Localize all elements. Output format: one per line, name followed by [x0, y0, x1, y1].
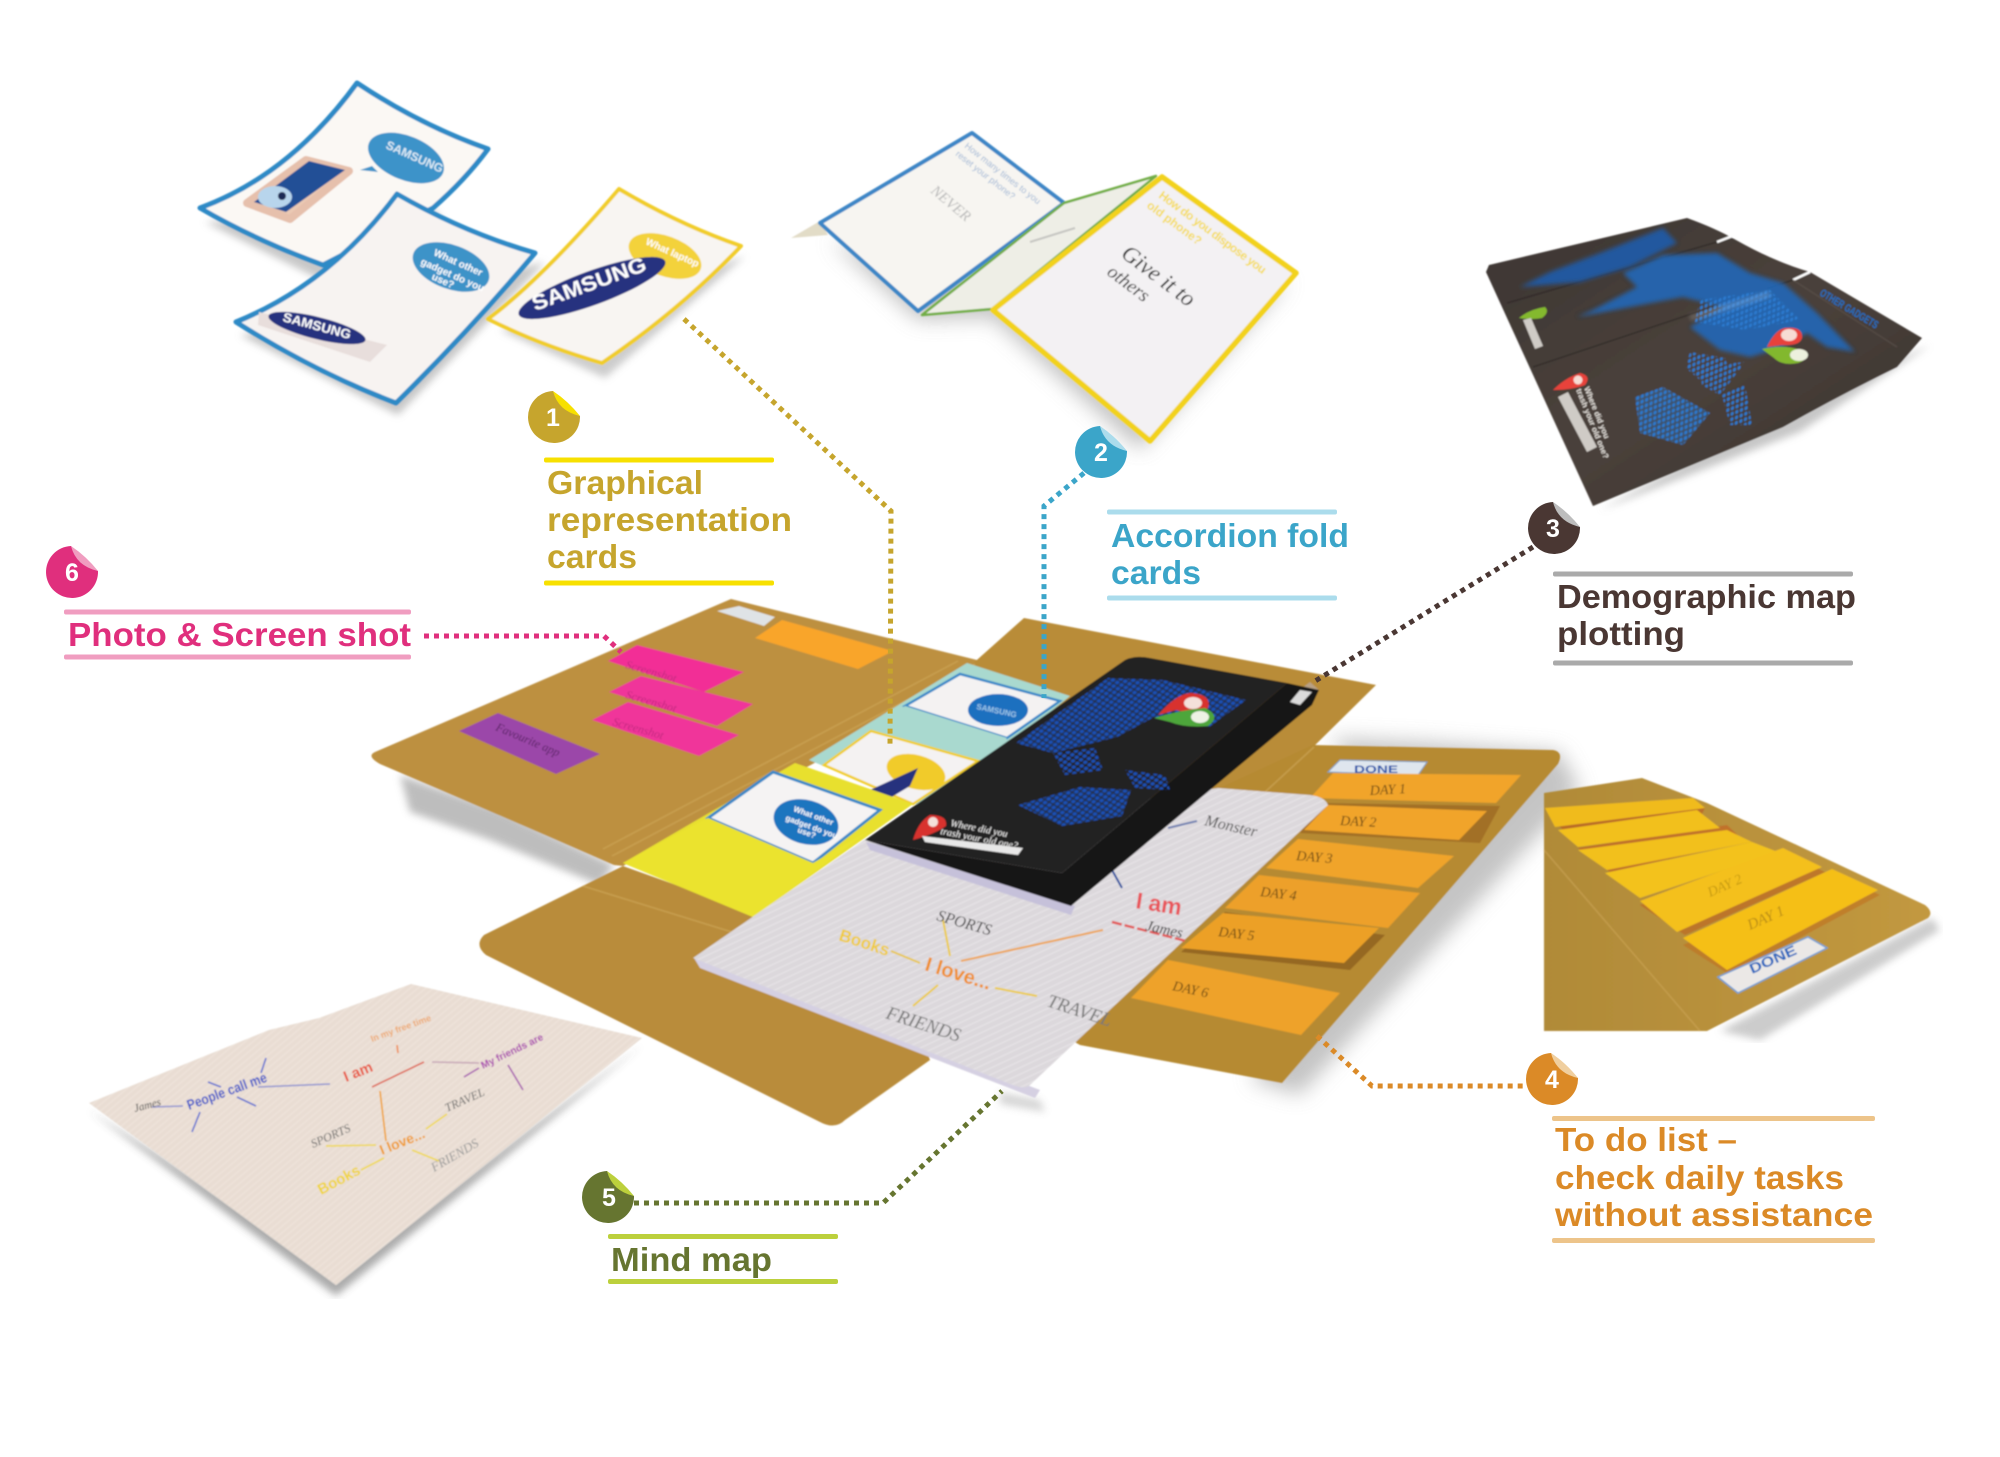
label 5: mind map [608, 1234, 838, 1284]
label 2: accordion fold cards: Accordion fold [1111, 517, 1349, 554]
accordion yellow panel: others [1103, 261, 1154, 307]
sticky notes: magenta, purple, orange, label: Favourite app [493, 719, 562, 759]
yellow pocket with blue card: What other [792, 804, 835, 827]
mind map pamphlet: Books [837, 926, 892, 960]
to-do slit shadows and notes: DAY 1 [1744, 903, 1787, 934]
mint pocket with cards: SAMSUNG [976, 702, 1017, 719]
panel: to-do list photo [1544, 778, 1940, 1040]
to-do day notes: DAY 4 [1259, 885, 1297, 904]
to-do day notes: DAY 3 [1295, 849, 1333, 867]
to-do day notes: DAY 5 [1217, 925, 1255, 944]
label 6: photo and screen shot: Photo & Screen shot [68, 616, 411, 653]
panel: mind map sheet photo: TRAVEL [443, 1085, 487, 1115]
card: yellow Samsung logo: SAMSUNG [529, 253, 649, 316]
badge 6: 6 [65, 559, 79, 587]
sticky notes: magenta, purple, orange, label: Screenshot [624, 687, 679, 715]
accordion blue panel: NEVER [927, 182, 973, 225]
badge 2: 2 [1094, 439, 1108, 467]
yellow pocket with blue card [623, 763, 913, 917]
label 4: to do list: check daily tasks [1555, 1159, 1844, 1196]
map answer bars and captions [1523, 287, 1880, 460]
badge 6 [46, 546, 98, 598]
panel: accordion fold cards photo [791, 133, 1296, 450]
badge 4: 4 [1545, 1066, 1559, 1094]
badge 2 [1075, 426, 1127, 478]
card: what other gadget: use? [430, 272, 456, 291]
folder top right flap [950, 618, 1376, 850]
panel: mind map sheet photo: My friends are [479, 1032, 546, 1072]
to-do slit shadows and notes: DAY 2 [1705, 872, 1745, 901]
label 6: photo and screen shot [64, 610, 411, 660]
to-do day notes: DAY 2 [1339, 814, 1377, 831]
sticky notes: magenta, purple, orange, label: Screenshot [611, 714, 666, 742]
map land masses [1520, 228, 1855, 445]
sticky notes: magenta, purple, orange, label [459, 606, 893, 774]
label 3: demographic map plotting: Demographic map [1557, 578, 1856, 615]
mind map pamphlet: I love... [923, 954, 994, 995]
folder bottom flap [479, 866, 930, 1126]
to-do done tag: DONE [1747, 942, 1799, 977]
card: phone with Samsung bubble [200, 83, 488, 282]
label 5: mind map: Mind map [611, 1241, 772, 1278]
card: yellow Samsung logo [488, 189, 745, 378]
label 4: to do list: without assistance [1554, 1196, 1873, 1233]
folder right panel [1000, 745, 1560, 1083]
to-do day notes: DAY 1 [1368, 782, 1406, 799]
card: what other gadget [236, 194, 545, 415]
to-do slit shadows and notes [1545, 798, 1880, 975]
label 1: graphical representation cards: cards [547, 538, 637, 575]
label 1: graphical representation cards: representation [547, 501, 792, 538]
badge 3: 3 [1546, 515, 1560, 543]
folder creases [583, 661, 1314, 933]
label 1: graphical representation cards [544, 458, 792, 586]
label 3: demographic map plotting [1553, 572, 1856, 666]
mind map pamphlet [693, 788, 1328, 1098]
badge 3 [1528, 502, 1580, 554]
panel: mind map sheet photo: SPORTS [309, 1121, 353, 1151]
leader line 1 [684, 319, 891, 745]
yellow pocket with blue card: use? [796, 825, 817, 840]
panel: mind map sheet photo [89, 984, 642, 1296]
accordion green middle panel [922, 176, 1156, 315]
leader line 6 [424, 636, 621, 652]
badge 5 [582, 1171, 634, 1223]
card: what other gadget: gadget do you [419, 257, 486, 295]
badge 1: 1 [546, 404, 560, 432]
mind map pamphlet: Monster [1202, 812, 1260, 841]
accordion blue panel: reset your phone? [954, 149, 1017, 201]
to-do day notes: DAY 6 [1170, 979, 1210, 1001]
mint pocket with cards [809, 663, 1070, 810]
panel: demographic map photo [1486, 218, 1930, 510]
black map booklet: trash your old one? [939, 826, 1019, 852]
folder left panel [371, 599, 985, 866]
folder shadows [400, 738, 1580, 1112]
label 4: to do list [1552, 1116, 1875, 1243]
to-do day notes: DONE [1354, 764, 1398, 776]
panel: mind map sheet photo: I am [341, 1059, 375, 1086]
card: phone with Samsung bubble: SAMSUNG [384, 138, 446, 176]
map answer bars and captions: trash your old one? [1574, 387, 1611, 460]
mind map pamphlet: FRIENDS [883, 1002, 964, 1047]
panel: mind map sheet photo: People call me [185, 1069, 269, 1113]
black map booklet: Where did you [949, 818, 1008, 840]
sticky notes: magenta, purple, orange, label: Screenshot [624, 657, 679, 685]
map answer bars and captions: OTHER GADGETS [1817, 287, 1880, 332]
leader line 3 [1312, 547, 1533, 683]
badge 1 [528, 391, 580, 443]
mind map pamphlet: SPORTS [935, 908, 993, 939]
label 1: graphical representation cards: Graphical [547, 464, 703, 501]
leader line 4 [1317, 1036, 1523, 1086]
mind map pamphlet: James [1144, 918, 1184, 942]
panel: mind map sheet photo: In my free time [369, 1013, 432, 1044]
mind map pamphlet: I am [1134, 887, 1184, 920]
badge 4 [1526, 1053, 1578, 1105]
panel: graphical representation cards photo [200, 83, 745, 415]
accordion yellow panel: Give it to [1117, 240, 1200, 312]
leader line 5 [634, 1091, 1002, 1203]
panel: mind map sheet photo: Books [315, 1162, 363, 1199]
label 2: accordion fold cards: cards [1111, 554, 1201, 591]
panel: mind map sheet photo: James [133, 1096, 162, 1115]
panel: mind map sheet photo: FRIENDS [427, 1135, 482, 1175]
leader line 2 [1044, 473, 1084, 698]
card: what other gadget: What other [432, 248, 484, 279]
accordion blue panel: How many times to you [963, 141, 1043, 206]
map pins [1519, 307, 1808, 390]
panel: folder centre photo [371, 599, 1580, 1126]
accordion yellow panel: How do you dispose you [1156, 188, 1269, 277]
mind map pamphlet: TRAVEL [1044, 991, 1114, 1031]
map answer bars and captions: Where did you [1582, 385, 1611, 440]
label 3: demographic map plotting: plotting [1557, 615, 1685, 652]
panel: mind map sheet photo: I love... [377, 1125, 427, 1158]
accordion yellow panel [993, 177, 1296, 441]
label 4: to do list: To do list – [1555, 1121, 1737, 1158]
yellow pocket with blue card: gadget do you [784, 813, 839, 841]
card: what other gadget: SAMSUNG [281, 309, 353, 342]
accordion yellow panel: old phone? [1144, 198, 1205, 248]
badge 5: 5 [602, 1184, 616, 1212]
label 2: accordion fold cards [1107, 510, 1349, 600]
accordion blue panel [820, 133, 1064, 311]
black map booklet [865, 657, 1319, 915]
to-do day notes [1131, 760, 1521, 1035]
card: yellow Samsung logo: What laptop [644, 237, 701, 270]
to-do done tag [1718, 937, 1827, 993]
